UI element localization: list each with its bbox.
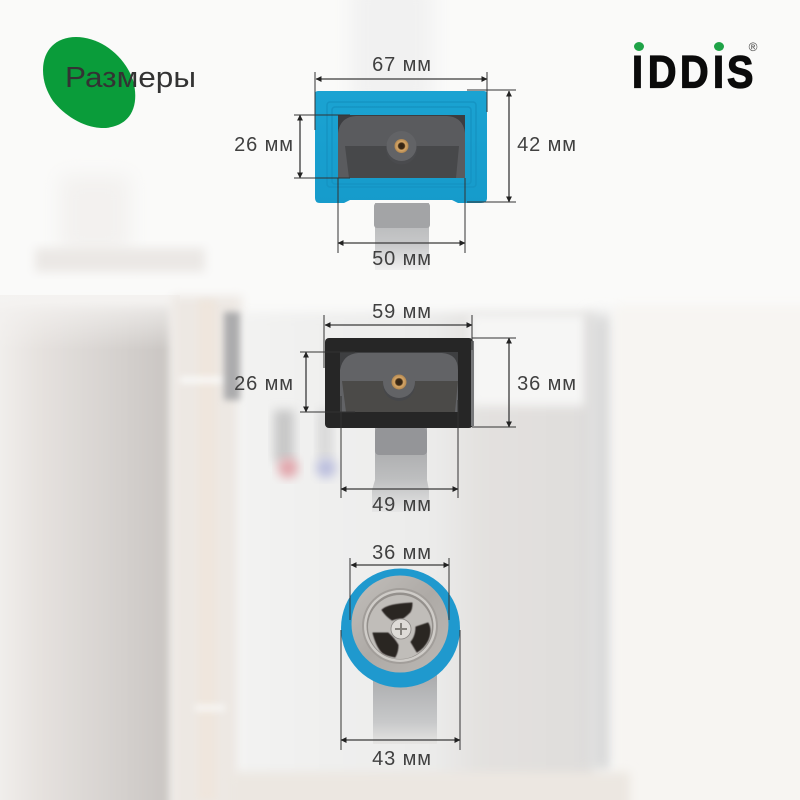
42 mm height: 42 мм — [517, 134, 577, 156]
strainer vents — [373, 603, 430, 657]
pipe collar — [374, 203, 430, 228]
product: round overflow with strainer — [341, 568, 460, 744]
dimensions: blue overflow — [234, 54, 577, 270]
logo green dots — [634, 42, 724, 51]
dark inner opening — [338, 115, 465, 178]
heading text: Размеры — [65, 62, 196, 94]
49 mm opening width — [341, 396, 458, 516]
26 mm opening height — [234, 115, 350, 178]
pipe — [373, 672, 437, 744]
blue frame — [315, 91, 487, 203]
26 mm opening height — [234, 352, 355, 412]
center screw — [391, 619, 411, 639]
26 mm opening height: 26 мм — [234, 134, 294, 156]
36 mm disc diameter — [350, 542, 449, 620]
steel disc — [352, 576, 448, 672]
67 mm width — [315, 54, 487, 130]
dark inner opening — [340, 352, 458, 412]
dimensions: black overflow — [234, 301, 577, 516]
50 mm opening width — [338, 178, 465, 270]
pipe — [375, 203, 429, 270]
heading: sizes with green blob — [43, 37, 196, 128]
product: black rectangular overflow — [325, 338, 474, 512]
26 mm opening height: 26 мм — [234, 373, 294, 395]
registered mark: ® — [749, 40, 758, 54]
brass nut — [386, 134, 417, 164]
brass nut — [383, 369, 415, 401]
pipe collar — [375, 428, 427, 455]
logo wordmark: IDDIS — [632, 47, 753, 97]
49 mm opening width: 49 мм — [372, 494, 432, 516]
black frame — [325, 338, 473, 428]
pipe — [372, 428, 429, 512]
59 mm width — [324, 301, 472, 368]
59 mm width: 59 мм — [372, 301, 432, 323]
blue ring — [341, 568, 460, 688]
36 mm height — [472, 338, 577, 427]
42 mm height — [467, 90, 577, 202]
dimensions: round overflow — [341, 542, 460, 770]
product: blue rectangular overflow — [315, 91, 487, 270]
IDDIS logo — [632, 40, 758, 97]
green blob — [43, 37, 135, 128]
67 mm width: 67 мм — [372, 54, 432, 76]
36 mm height: 36 мм — [517, 373, 577, 395]
50 mm opening width: 50 мм — [372, 248, 432, 270]
43 mm ring diameter — [341, 630, 460, 770]
36 mm disc diameter: 36 мм — [372, 542, 432, 564]
43 mm ring diameter: 43 мм — [372, 748, 432, 770]
